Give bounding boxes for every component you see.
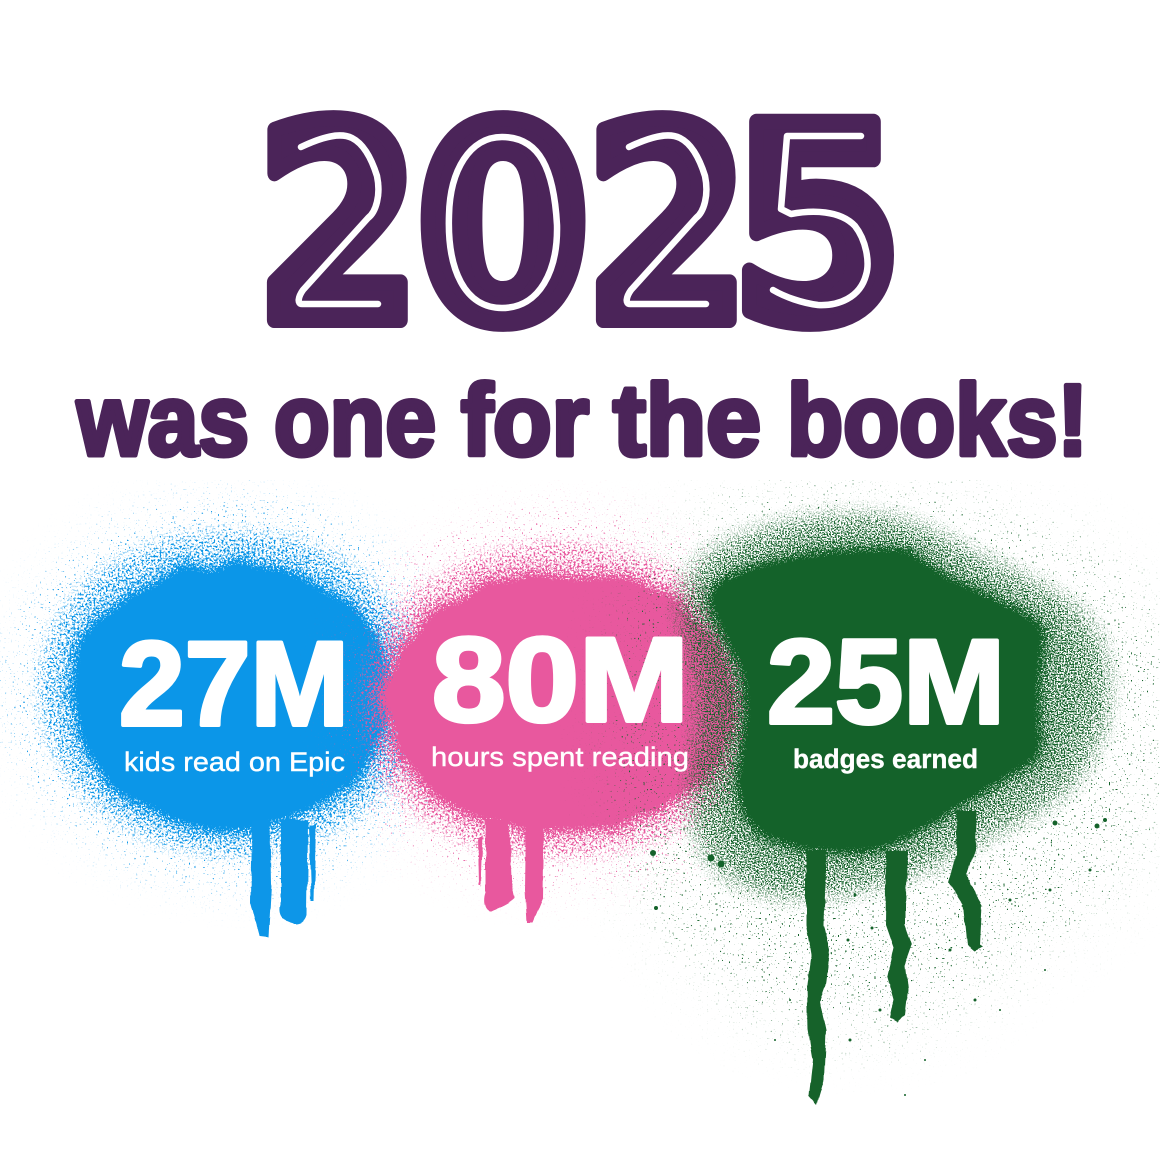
blob: blue spray bbox=[45, 539, 410, 937]
subtitle bbox=[76, 365, 1088, 477]
year digits: 2 bbox=[255, 68, 422, 385]
subtitle: was bbox=[76, 365, 249, 477]
year digits: 0 bbox=[416, 67, 590, 385]
number 25M: 25M bbox=[767, 615, 1005, 749]
pink far specks bbox=[372, 550, 750, 850]
title: 2025 with inline strokes bbox=[255, 67, 904, 385]
green droplets bbox=[650, 818, 1107, 1096]
number 27M: 27M bbox=[119, 617, 349, 751]
green drips bbox=[806, 810, 983, 1104]
white inline strokes on digits bbox=[299, 135, 868, 308]
label badges earned: badges earned bbox=[793, 744, 978, 774]
year digits: 5 bbox=[730, 67, 904, 385]
label hours spent reading: hours spent reading bbox=[431, 742, 689, 772]
green halo bbox=[700, 543, 1082, 870]
green far specks bbox=[676, 552, 1130, 979]
subtitle: the bbox=[613, 365, 761, 477]
subtitle: books! bbox=[787, 365, 1088, 477]
pink halo bbox=[382, 565, 740, 835]
number 80M: 80M bbox=[432, 613, 689, 747]
blob: green spray bbox=[650, 543, 1130, 1104]
blue drips bbox=[251, 820, 316, 937]
label kids read on Epic: kids read on Epic bbox=[124, 747, 345, 777]
subtitle: for bbox=[461, 365, 589, 477]
pink drips bbox=[478, 820, 544, 922]
year digits bbox=[255, 67, 904, 385]
green core bbox=[708, 550, 1044, 851]
stat: 25M bbox=[767, 615, 1005, 774]
blue core bbox=[72, 565, 388, 830]
blue halo bbox=[60, 554, 398, 835]
pink core bbox=[386, 574, 735, 830]
year digits: 2 bbox=[584, 68, 751, 385]
blob: pink spray bbox=[372, 550, 750, 922]
stat: 27M bbox=[119, 617, 349, 777]
stat: 80M bbox=[431, 613, 689, 772]
subtitle: one bbox=[274, 365, 436, 477]
blue far specks bbox=[45, 539, 410, 850]
